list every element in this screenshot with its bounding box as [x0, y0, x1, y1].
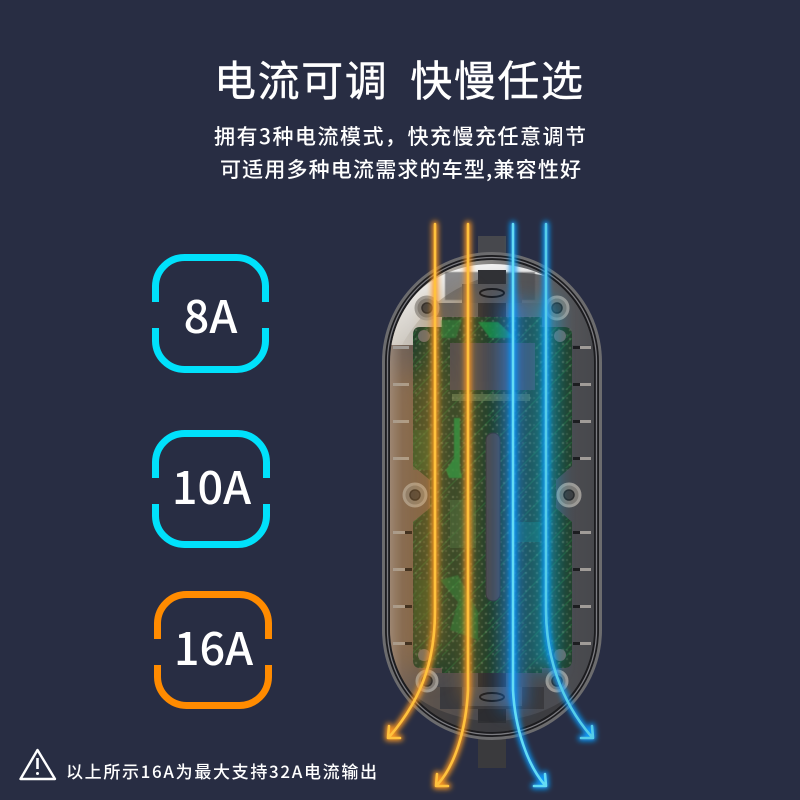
blue current glow [503, 300, 556, 710]
shell end details [390, 260, 594, 732]
subtitle text block: 拥有3种电流模式，快充慢充任意调节 [214, 121, 586, 151]
orange current glow [395, 370, 440, 670]
badge: 10A [156, 433, 266, 545]
arrow: orange current 1 [388, 224, 435, 738]
device bottom cable [478, 738, 506, 768]
board green traces [440, 320, 515, 640]
subtitle text block: 可适用多种电流需求的车型,兼容性好 [220, 154, 581, 184]
arrow: orange current 2 [436, 224, 468, 786]
icon: warning triangle [20, 750, 55, 779]
centre slot [486, 433, 500, 601]
footnote: 以上所示16A为最大支持32A电流输出 [66, 758, 377, 783]
badge: 16A [158, 594, 268, 706]
chip cover [450, 343, 535, 390]
device: charging control box [382, 236, 602, 768]
circuit board [413, 317, 572, 673]
arrow: blue current 4 [546, 224, 593, 738]
device outer shell [382, 252, 602, 740]
title: 电流可调 快慢任选 [214, 48, 583, 109]
device top cable [478, 236, 506, 256]
badge: 8A [156, 257, 266, 370]
orange line glow [428, 290, 475, 700]
badge: 8A: 8A [184, 281, 237, 346]
screw posts [404, 297, 580, 691]
badge: 16A: 16A [174, 613, 253, 678]
arrow: blue current 3 [513, 224, 546, 786]
device side ribs [393, 346, 591, 645]
badge: 10A: 10A [172, 452, 251, 517]
subtitle text block [214, 121, 586, 184]
